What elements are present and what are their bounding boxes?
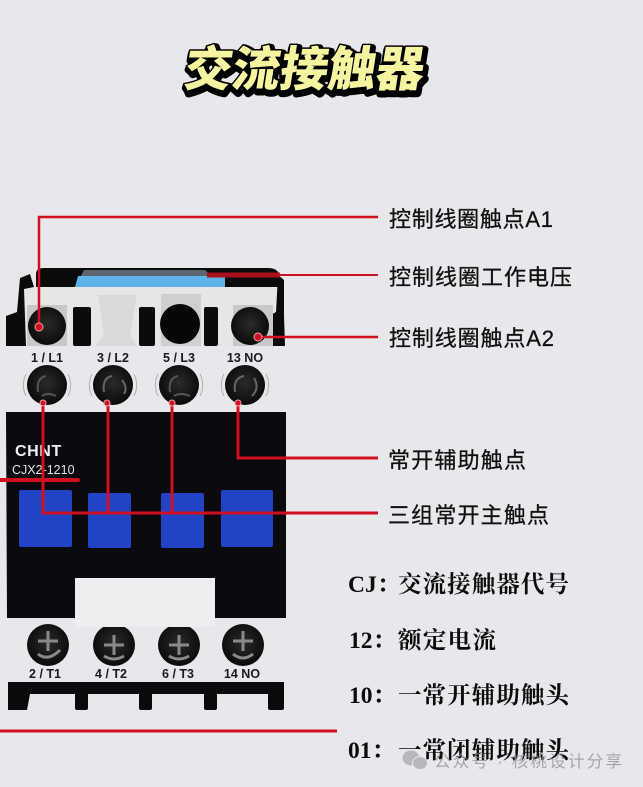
title: 交流接触器 bbox=[180, 30, 431, 100]
blue buttons bbox=[19, 490, 273, 548]
label: coil voltage: 控制线圈工作电压 bbox=[389, 265, 572, 290]
model code legend: 一常闭辅助触头 bbox=[398, 737, 572, 764]
label: A1: 控制线圈触点A1 bbox=[389, 207, 553, 232]
label: main contacts: 三组常开主触点 bbox=[388, 503, 549, 528]
terminal labels top: 1 / L1 bbox=[31, 351, 63, 365]
leader: main contacts bbox=[43, 402, 378, 513]
terminal labels top: 3 / L2 bbox=[97, 351, 129, 365]
leader: coil voltage bbox=[207, 272, 280, 278]
legend: 10: 10： bbox=[349, 683, 396, 709]
top cover bbox=[6, 268, 285, 347]
terminal labels bottom: 14 NO bbox=[224, 667, 260, 681]
legend: CJ: CJ： bbox=[348, 572, 400, 598]
top terminal screws bbox=[23, 365, 269, 405]
leader: coil contact A1 bbox=[39, 217, 378, 327]
model code legend bbox=[348, 571, 572, 764]
model code legend: 交流接触器代号 bbox=[398, 571, 569, 598]
contactor body illustration bbox=[6, 268, 286, 710]
brand text: CJX2-1210 bbox=[12, 463, 75, 477]
brand text bbox=[12, 443, 75, 477]
terminal labels top: 5 / L3 bbox=[163, 351, 195, 365]
leader: coil contact A2 bbox=[258, 336, 378, 338]
terminal labels bottom: 4 / T2 bbox=[95, 667, 127, 681]
black housing bbox=[6, 412, 286, 618]
leader: left stub bbox=[0, 478, 78, 482]
white label plate bbox=[75, 578, 215, 627]
terminal labels top: 13 NO bbox=[227, 351, 263, 365]
model code legend: 额定电流 bbox=[397, 627, 496, 654]
red terminal dots bbox=[35, 323, 262, 406]
icon: wechat bbox=[402, 750, 428, 770]
label: A2: 控制线圈触点A2 bbox=[389, 326, 554, 351]
leader: auxiliary contact bbox=[238, 402, 378, 458]
bottom rail bbox=[8, 682, 284, 710]
terminal labels top bbox=[31, 351, 263, 365]
terminal labels bottom bbox=[29, 667, 260, 681]
watermark: 公众号 · 核桃设计分享 bbox=[434, 752, 622, 771]
leader: bottom line bbox=[0, 730, 337, 732]
model code legend: 一常开辅助触头 bbox=[398, 682, 572, 709]
bottom terminal screws bbox=[27, 624, 264, 666]
legend: 12: 12： bbox=[349, 628, 396, 654]
brand text: CHNT bbox=[15, 443, 62, 460]
title: 交流接触器 bbox=[181, 33, 433, 103]
red leader lines bbox=[0, 217, 378, 731]
label: auxiliary: 常开辅助触点 bbox=[388, 448, 526, 473]
terminal labels bottom: 2 / T1 bbox=[29, 667, 61, 681]
legend: 01: 01： bbox=[348, 738, 395, 764]
terminal labels bottom: 6 / T3 bbox=[162, 667, 194, 681]
callout labels bbox=[388, 207, 572, 528]
